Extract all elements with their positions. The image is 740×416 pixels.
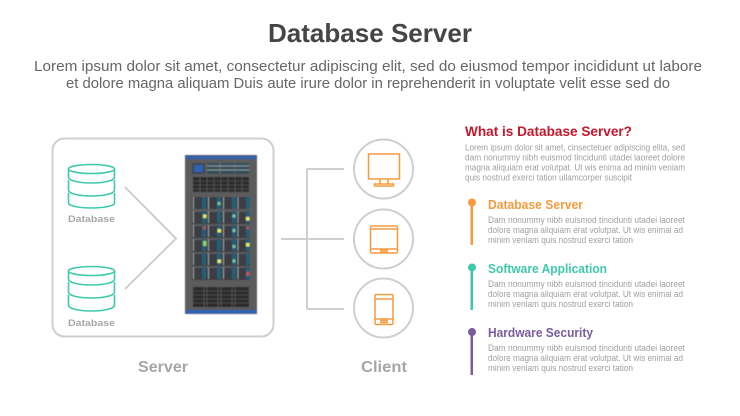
- heading: hardware security: Hardware Security: [488, 326, 593, 340]
- body: hardware security: minim veniam quis nostrud exerci tation: [488, 363, 633, 373]
- marker: teal: [468, 264, 476, 310]
- item: software application: [468, 262, 686, 310]
- rack units: [192, 197, 250, 280]
- label: server: Server: [138, 359, 188, 376]
- icon: monitor client: [354, 140, 413, 198]
- body: database server: Dam nonummy nibh euismod tincidunti utadei laoreet: [488, 215, 686, 225]
- icon: database top: [68, 164, 114, 208]
- subtitle: [34, 59, 702, 92]
- text block: intro: [465, 142, 685, 182]
- text block: intro: dam nonummy nibh euismod tincidunti utadei laoreet dolore: [465, 152, 685, 162]
- subtitle: Lorem ipsum dolor sit amet, consectetur adipiscing elit, sed do eiusmod tempor incididunt ut labore: [34, 59, 702, 75]
- panel: server frame: [52, 138, 274, 336]
- body: database server: [488, 215, 686, 245]
- marker: purple: [468, 328, 476, 375]
- body: software application: minim veniam quis nostrud exerci tation: [488, 299, 633, 309]
- body: database server: dolore magna aliquiam erat volutpat. Ut wis enimai ad: [488, 225, 683, 235]
- label: database bottom: Database: [68, 318, 115, 329]
- item: database server: [468, 198, 686, 245]
- connector: server to clients: [281, 169, 344, 309]
- server rack: [185, 155, 257, 314]
- title: Database Server: [268, 18, 472, 48]
- icon: phone client: [354, 278, 413, 338]
- body: database server: minim veniam quis nostrud exerci tation: [488, 235, 633, 245]
- marker: orange: [468, 198, 476, 245]
- text block: intro: quis nostrud exerci tation ullamcorper suscipit: [465, 172, 633, 182]
- body: hardware security: [488, 343, 686, 373]
- icon: database bottom: [68, 266, 114, 311]
- label: client: Client: [361, 359, 408, 376]
- body: hardware security: Dam nonummy nibh euismod tincidunti utadei laoreet: [488, 343, 686, 353]
- body: software application: dolore magna aliquiam erat volutpat. Ut wis enimai ad: [488, 289, 683, 299]
- text block: intro: Lorem ipsum dolor sit amet, cinsectetuer adipiscing elita, sed: [465, 142, 685, 152]
- text block: intro: magna aliquiam erat volutpat. Ut wis enima ad minim veniam: [465, 162, 685, 172]
- label: database top: Database: [68, 214, 115, 225]
- body: software application: Dam nonummy nibh euismod tincidunti utadei laoreet: [488, 279, 686, 289]
- heading: what is: What is Database Server?: [465, 124, 632, 139]
- subtitle: et dolore magna aliquam Duis aute irure dolor in reprehenderit in voluptate velit esse sed do: [66, 76, 670, 92]
- body: software application: [488, 279, 686, 309]
- item: hardware security: [468, 326, 686, 375]
- heading: software application: Software Application: [488, 262, 607, 276]
- heading: database server: Database Server: [488, 198, 583, 212]
- arrow: databases to rack: [125, 187, 176, 289]
- body: hardware security: dolore magna aliquiam erat volutpat. Ut wis enimai ad: [488, 353, 683, 363]
- icon: tablet client: [354, 210, 413, 268]
